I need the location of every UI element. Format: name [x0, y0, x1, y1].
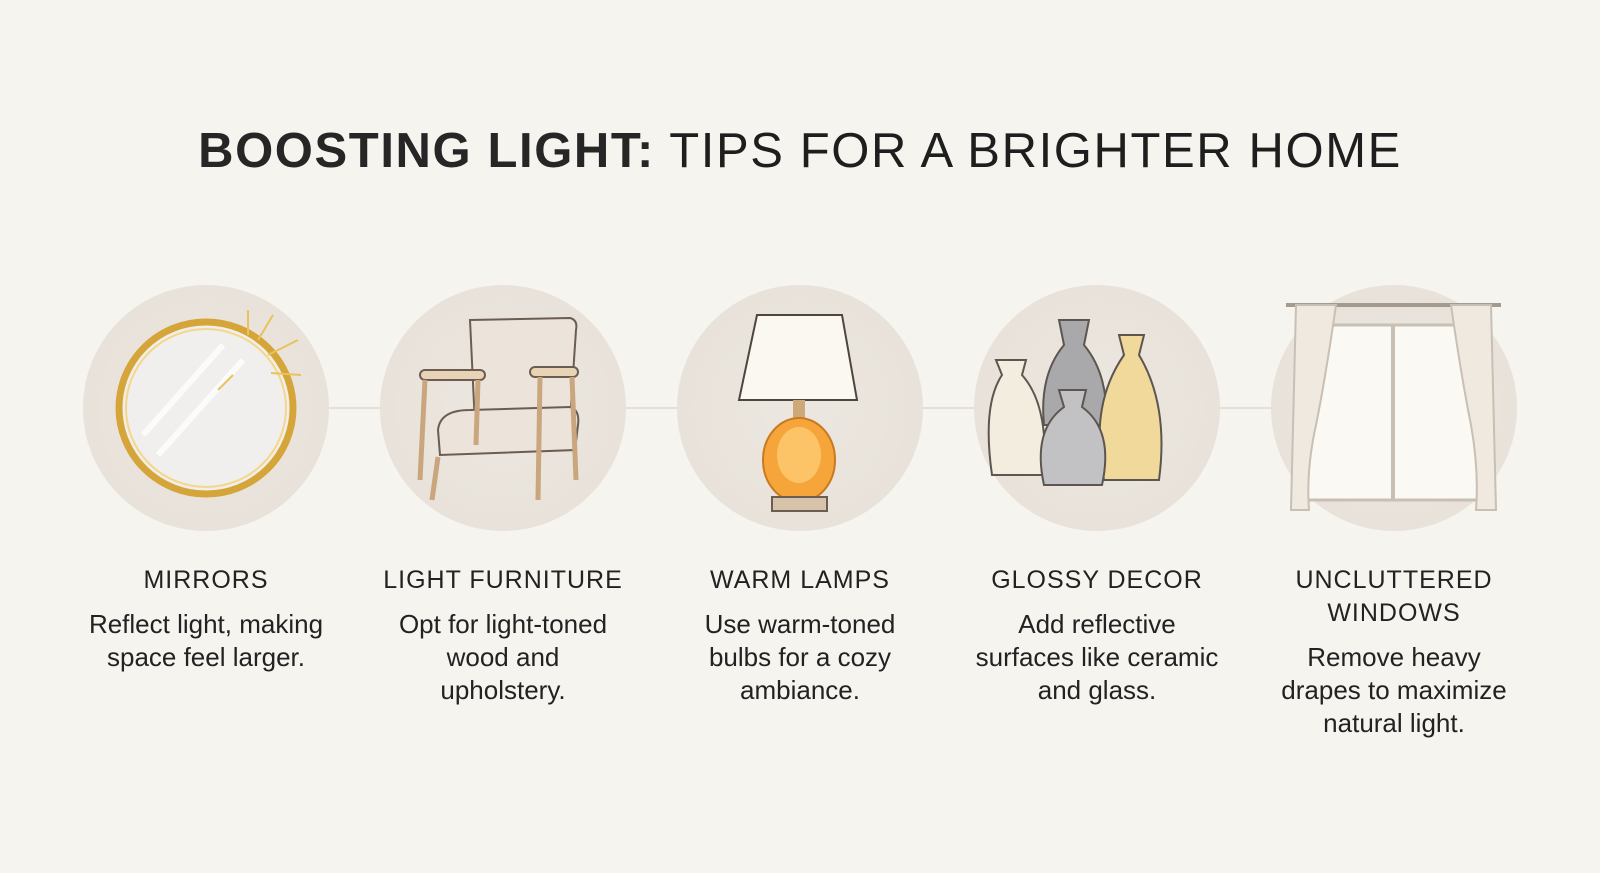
tip: light furniture	[383, 566, 623, 705]
circle: furniture	[380, 285, 626, 531]
tip: light furniture: LIGHT FURNITURE	[383, 566, 623, 594]
icon: mirror	[116, 310, 302, 498]
circle: windows	[1271, 285, 1517, 531]
tip: warm lamps: bulbs for a cozy	[709, 642, 891, 672]
tip: uncluttered windows	[1281, 566, 1507, 738]
icon: lamp	[738, 314, 858, 512]
tip: uncluttered windows: UNCLUTTERED	[1295, 566, 1493, 594]
tip: mirrors	[89, 566, 323, 672]
tip: light furniture: Opt for light-toned	[399, 609, 607, 639]
tip: warm lamps: WARM LAMPS	[710, 566, 890, 594]
tip: warm lamps: ambiance.	[740, 675, 860, 705]
tip: glossy decor: GLOSSY DECOR	[991, 566, 1203, 594]
tip: uncluttered windows: WINDOWS	[1327, 599, 1461, 627]
tip: uncluttered windows: drapes to maximize	[1281, 675, 1507, 705]
tip: mirrors: MIRRORS	[143, 566, 269, 594]
title: BOOSTING LIGHT: TIPS FOR A BRIGHTER HOME	[198, 124, 1402, 178]
tip: glossy decor: Add reflective	[1018, 609, 1176, 639]
circle: decor	[974, 285, 1220, 531]
tip: glossy decor: surfaces like ceramic	[976, 642, 1218, 672]
tip: uncluttered windows: Remove heavy	[1307, 642, 1481, 672]
circle: mirrors	[83, 285, 329, 531]
tip: light furniture: wood and	[447, 642, 559, 672]
tip: mirrors: space feel larger.	[107, 642, 305, 672]
tip: uncluttered windows: natural light.	[1323, 708, 1465, 738]
tip: warm lamps	[705, 566, 895, 705]
icon: vases	[988, 319, 1162, 486]
tip: warm lamps: Use warm-toned	[705, 609, 895, 639]
tip: mirrors: Reflect light, making	[89, 609, 323, 639]
circle: lamps	[677, 285, 923, 531]
tip: glossy decor	[976, 566, 1218, 705]
tip: glossy decor: and glass.	[1038, 675, 1156, 705]
tip: light furniture: upholstery.	[440, 675, 566, 705]
icon: window	[1286, 303, 1501, 511]
icon: armchair	[418, 317, 580, 500]
